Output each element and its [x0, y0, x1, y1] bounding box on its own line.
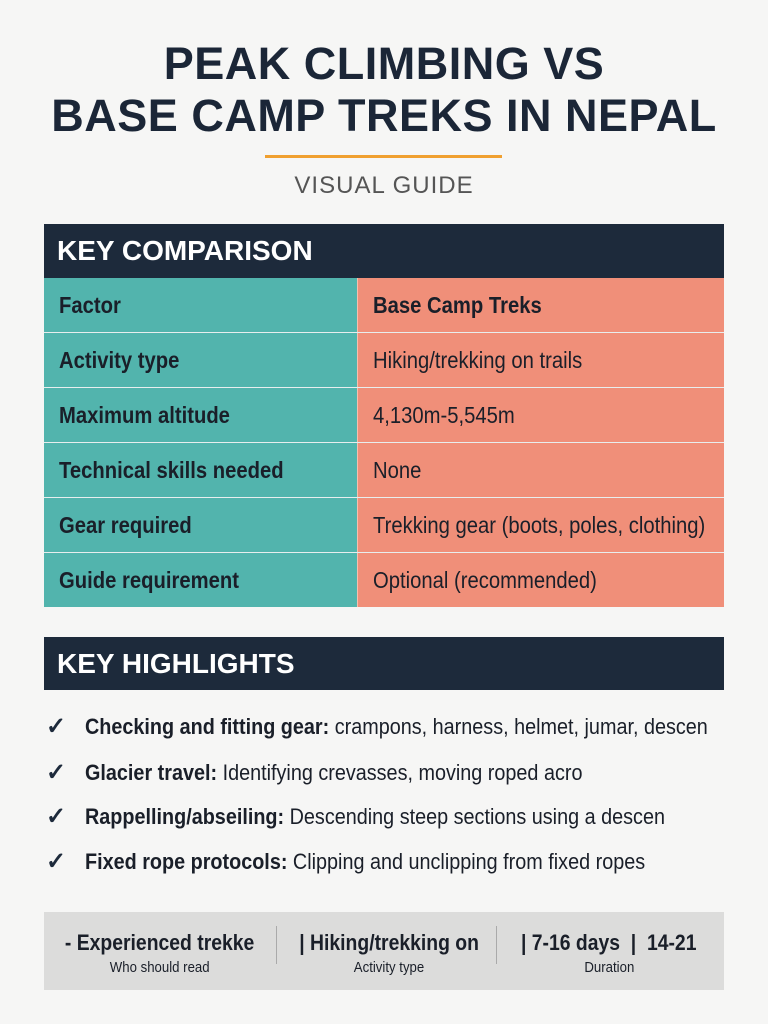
list: highlights: ✓ — [46, 848, 66, 875]
heading: key highlights — [44, 637, 724, 690]
divider accent — [265, 155, 502, 158]
title — [51, 38, 717, 141]
table: comparison: None — [373, 457, 421, 483]
summary strip — [44, 912, 724, 990]
summary strip: | 7-16 days | 14-21 — [521, 930, 697, 955]
table: comparison: Hiking/trekking on trails — [373, 347, 582, 373]
summary strip: Duration — [584, 959, 634, 976]
list: highlights: Glacier travel: Identifying crevasses, moving roped acro — [85, 760, 582, 785]
table: comparison: Base Camp Treks — [373, 292, 542, 318]
table: comparison: Factor — [59, 292, 121, 318]
subtitle: VISUAL GUIDE — [294, 172, 474, 199]
table: comparison: Technical skills needed — [59, 457, 284, 483]
table: comparison: Maximum altitude — [59, 402, 230, 428]
heading: key comparison: KEY COMPARISON — [57, 235, 313, 266]
list: highlights: Rappelling/abseiling: Descending steep sections using a descen — [85, 804, 665, 829]
title: PEAK CLIMBING VS — [164, 38, 604, 89]
table: comparison: Trekking gear (boots, poles, clothing) — [373, 512, 705, 538]
list: highlights: Fixed rope protocols: Clipping and unclipping from fixed ropes — [85, 849, 645, 874]
summary strip: Who should read — [110, 959, 210, 976]
table: comparison: 4,130m-5,545m — [373, 402, 515, 428]
table: comparison: Activity type — [59, 347, 179, 373]
table: comparison: Gear required — [59, 512, 192, 538]
list: highlights: ✓ — [46, 713, 66, 740]
table: comparison — [44, 278, 724, 607]
title: BASE CAMP TREKS IN NEPAL — [51, 90, 717, 141]
summary strip: - Experienced trekke — [65, 930, 255, 955]
table: comparison: Guide requirement — [59, 567, 239, 593]
summary strip: Activity type — [354, 959, 424, 976]
list: highlights: ✓ — [46, 759, 66, 786]
heading: key comparison — [44, 224, 724, 278]
list: highlights — [46, 713, 708, 875]
list: highlights: ✓ — [46, 803, 66, 830]
table: comparison: Optional (recommended) — [373, 567, 597, 593]
list: highlights: Checking and fitting gear: crampons, harness, helmet, jumar, descen — [85, 714, 708, 739]
summary strip: | Hiking/trekking on — [299, 930, 479, 955]
heading: key highlights: KEY HIGHLIGHTS — [57, 648, 295, 679]
